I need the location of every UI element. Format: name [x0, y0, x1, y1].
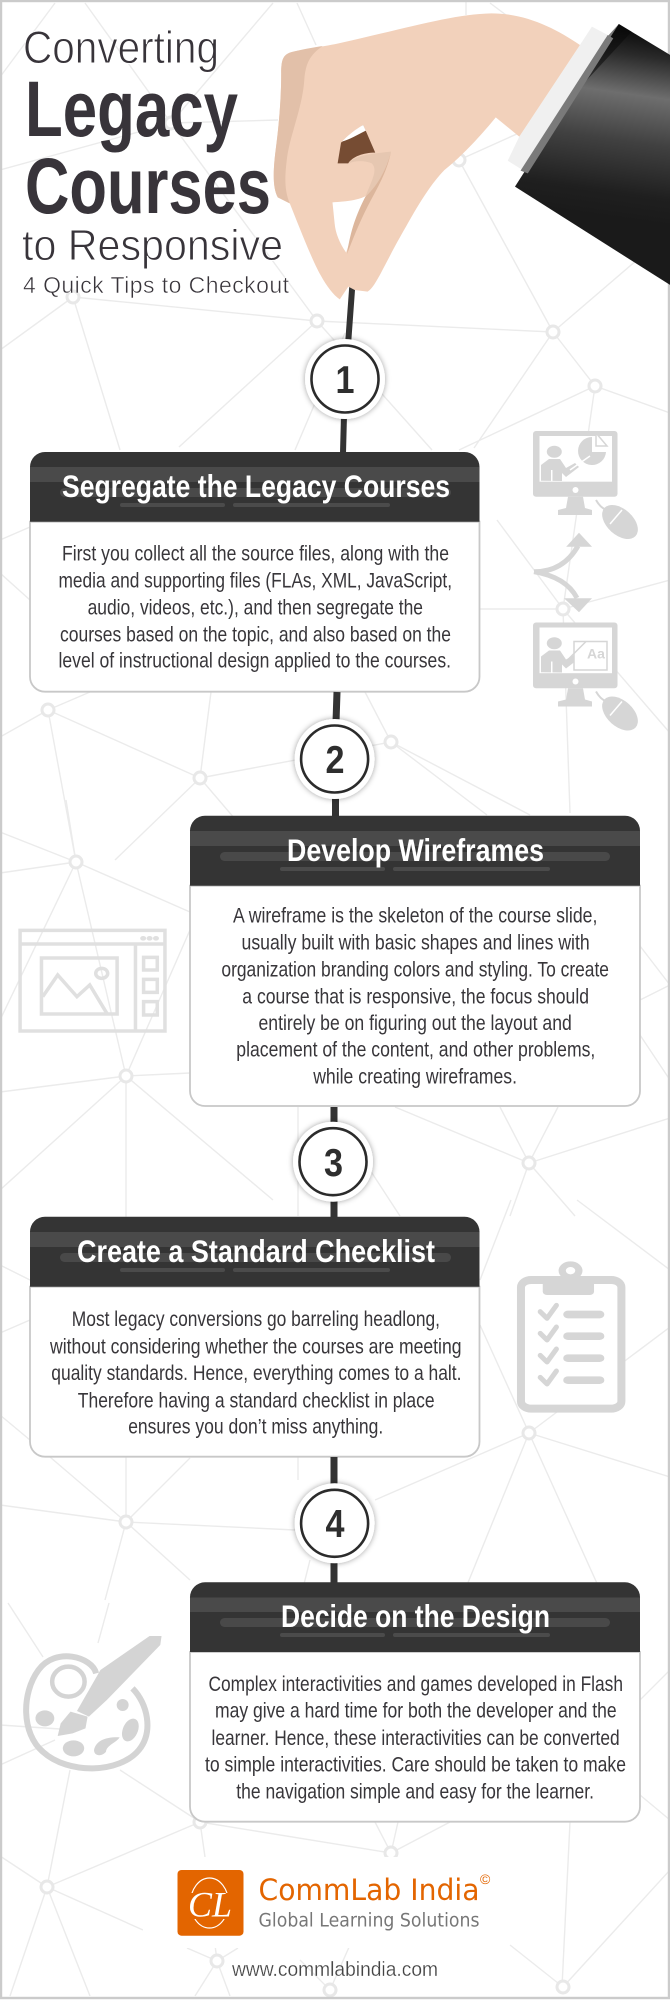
body text: while creating wireframes. — [312, 1064, 517, 1088]
website url: www.commlabindia.com — [231, 1958, 438, 1981]
heading: Segregate the Legacy Courses — [62, 468, 450, 504]
title: Converting — [23, 22, 219, 73]
panel: tip 1 — [30, 452, 480, 692]
body text: the navigation simple and easy for the learner. — [236, 1779, 594, 1803]
panel: tip 2 — [190, 816, 640, 1106]
body text: Therefore having a standard checklist in place — [78, 1388, 435, 1412]
icon: paint palette and brush — [26, 1636, 162, 1768]
tagline: Global Learning Solutions — [258, 1911, 480, 1932]
step 3 number badge: 3 — [324, 1142, 343, 1185]
body text: audio, videos, etc.), and then segregate the — [88, 596, 423, 620]
body text — [58, 542, 452, 673]
logo mark — [178, 1870, 244, 1936]
illustration: hand holding thread — [274, 13, 670, 299]
body text: level of instructional design applied to the courses. — [58, 649, 451, 673]
body text — [49, 1307, 462, 1438]
step 1 number badge — [305, 339, 385, 419]
body text: a course that is responsive, the focus should — [242, 984, 589, 1008]
title: 4 Quick Tips to Checkout — [23, 272, 290, 298]
icon: monitor with chart, arrows and monitor with text — [533, 431, 644, 737]
body text: placement of the content, and other problems, — [236, 1038, 595, 1062]
logo: CommLab India — [178, 1870, 491, 1936]
title: Legacy — [25, 64, 238, 153]
heading: Create a Standard Checklist — [77, 1233, 435, 1269]
step 2 number badge — [295, 719, 375, 799]
icon: presentation monitor with text slide: Aa — [587, 646, 605, 662]
step 3 number badge — [293, 1122, 373, 1202]
body text: usually built with basic shapes and lines with — [242, 930, 590, 954]
body text: quality standards. Hence, everything comes to a halt. — [51, 1361, 462, 1385]
body text: First you collect all the source files, along with the — [62, 542, 449, 566]
connector 1 to 2 — [336, 692, 337, 816]
heading: Decide on the Design — [281, 1598, 550, 1634]
connector 3 to 4 — [330, 1457, 338, 1583]
step 2 number badge: 2 — [326, 739, 344, 782]
step 4 number badge: 4 — [326, 1503, 345, 1546]
icon: presentation monitor with pie chart — [533, 431, 644, 546]
brand name: CommLab India — [258, 1873, 480, 1907]
body text — [205, 1672, 626, 1803]
body text: courses based on the topic, and also based on the — [60, 623, 451, 647]
connector 2 to 3 — [330, 1107, 338, 1217]
body text: entirely be on figuring out the layout and — [258, 1011, 572, 1035]
title: Courses — [25, 141, 271, 230]
icon: presentation monitor with text slide — [533, 622, 644, 737]
logo mark: CL — [188, 1885, 232, 1925]
body text: A wireframe is the skeleton of the course slide, — [233, 904, 597, 928]
copyright mark: © — [480, 1871, 491, 1887]
body text: Most legacy conversions go barreling headlong, — [72, 1307, 440, 1331]
heading: Develop Wireframes — [287, 832, 544, 868]
body text: without considering whether the courses are meeting — [49, 1334, 462, 1358]
title: to Responsive — [22, 221, 283, 270]
step 1 number badge: 1 — [336, 359, 354, 402]
panel: tip 3 — [30, 1217, 480, 1457]
thread from hand to step 1 — [343, 283, 352, 453]
body text — [221, 904, 609, 1088]
icon: branching arrows — [534, 533, 592, 612]
icon: checklist clipboard — [521, 1261, 621, 1409]
step 4 number badge — [295, 1483, 375, 1563]
body text: ensures you don’t miss anything. — [128, 1414, 383, 1438]
panel: tip 4 — [190, 1582, 640, 1822]
title — [22, 22, 290, 298]
body text: media and supporting files (FLAs, XML, JavaScript, — [58, 569, 452, 593]
icon: wireframe layout — [20, 930, 165, 1031]
